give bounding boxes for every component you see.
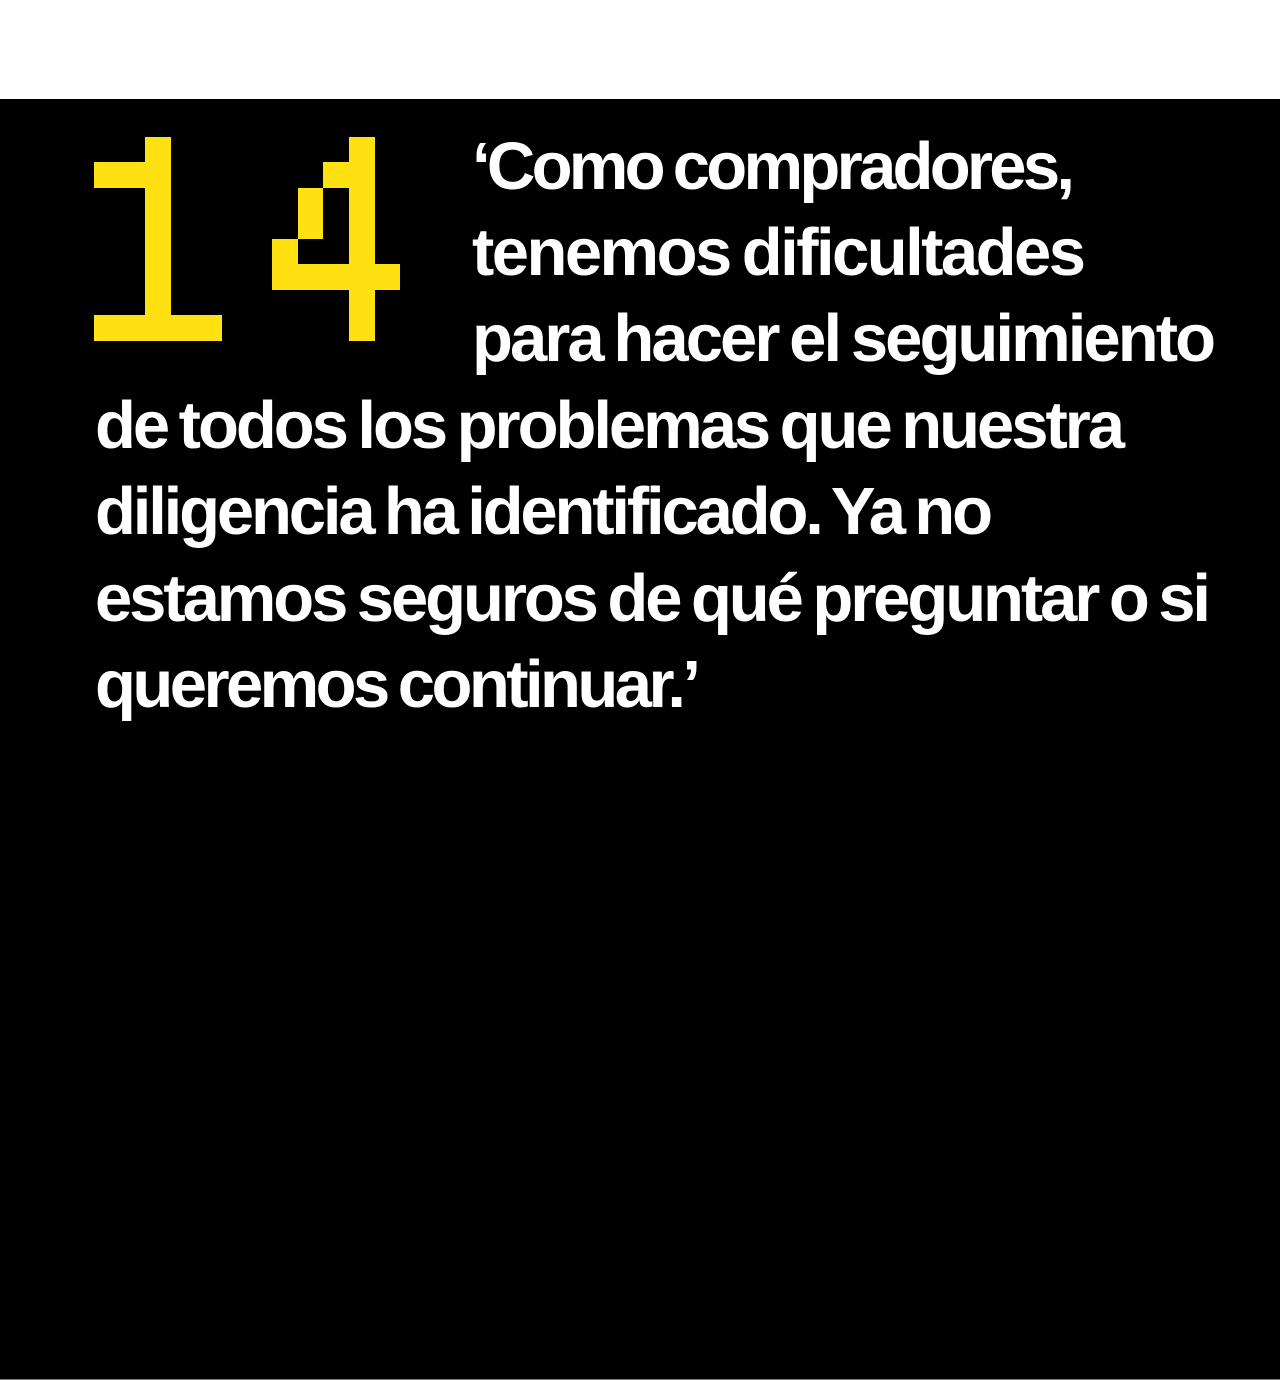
- quote text: diligencia ha identificado. Ya no: [95, 474, 993, 549]
- quote text: estamos seguros de qué preguntar o si: [95, 561, 1211, 636]
- quote text: para hacer el seguimiento: [472, 301, 1216, 376]
- quote text: [95, 129, 1216, 722]
- quote text: queremos continuar.’: [95, 647, 701, 722]
- quote text: ‘Como compradores,: [472, 129, 1075, 204]
- icon: pixel number 14: [94, 137, 400, 341]
- quote text: tenemos dificultades: [472, 215, 1086, 290]
- quote text: de todos los problemas que nuestra: [95, 388, 1126, 463]
